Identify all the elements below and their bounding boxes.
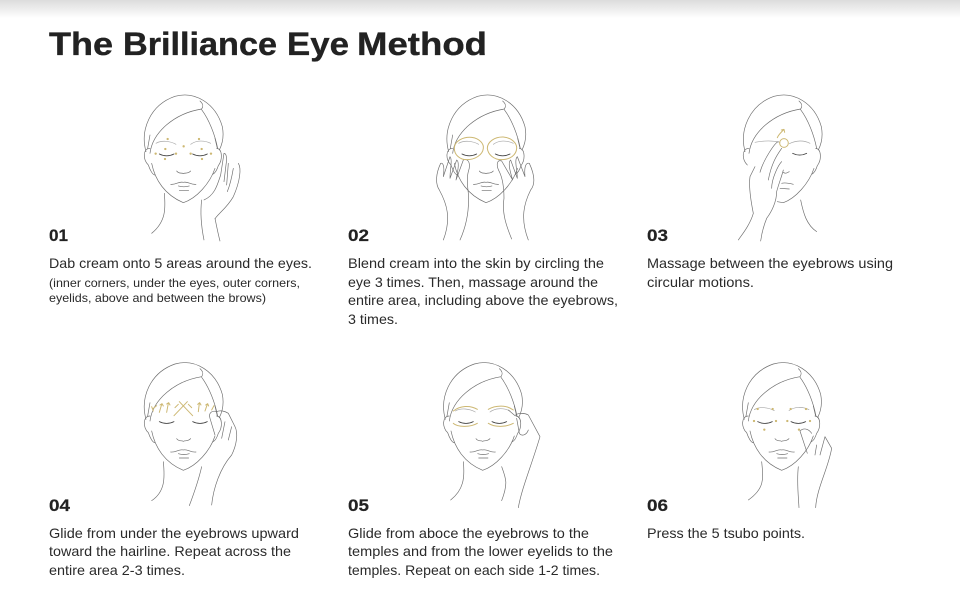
step text: Dab cream onto 5 areas around the eyes. bbox=[49, 255, 312, 271]
step text bbox=[348, 255, 618, 327]
panel: step 06 bbox=[647, 363, 832, 541]
step number: 05 bbox=[348, 496, 369, 515]
panel: step 05 bbox=[348, 363, 613, 578]
panel: step 01 bbox=[49, 95, 312, 305]
step text: Massage between the eyebrows using bbox=[647, 255, 893, 271]
step text bbox=[348, 525, 613, 578]
step number: 06 bbox=[647, 496, 668, 515]
step text: eye 3 times. Then, massage around the bbox=[348, 274, 598, 290]
title: Brilliance bbox=[123, 26, 277, 62]
step text bbox=[647, 255, 893, 290]
illustration: gliding toward the hairline bbox=[144, 363, 237, 506]
step text: temples. Repeat on each side 1-2 times. bbox=[348, 562, 600, 578]
illustration: gliding from brows and lower lids to the temples bbox=[444, 363, 540, 508]
illustration: pressing tsubo points bbox=[743, 363, 832, 508]
panel: step 03 bbox=[647, 95, 893, 290]
step text: Glide from under the eyebrows upward bbox=[49, 525, 299, 541]
step text: Glide from aboce the eyebrows to the bbox=[348, 525, 589, 541]
step text: eyelids, above and between the brows) bbox=[49, 291, 266, 305]
title bbox=[49, 26, 487, 62]
illustration: dabbing cream on five eye areas bbox=[144, 95, 240, 241]
panel: step 02 bbox=[348, 95, 618, 327]
step text: entire area 2-3 times. bbox=[49, 562, 185, 578]
step text: Press the 5 tsubo points. bbox=[647, 525, 805, 541]
step text: (inner corners, under the eyes, outer corners, bbox=[49, 276, 300, 290]
step text: Blend cream into the skin by circling the bbox=[348, 255, 604, 271]
step number: 02 bbox=[348, 226, 369, 245]
title: Eye bbox=[287, 26, 349, 62]
top shadow band bbox=[0, 0, 960, 18]
title: Method bbox=[357, 26, 487, 62]
step text: circular motions. bbox=[647, 274, 754, 290]
step text: toward the hairline. Repeat across the bbox=[49, 543, 291, 559]
panel: step 04 bbox=[49, 363, 299, 578]
step text: entire area, including above the eyebrows, bbox=[348, 292, 618, 308]
step text bbox=[49, 255, 312, 305]
illustration: massaging between the eyebrows bbox=[738, 95, 822, 241]
step number: 04 bbox=[49, 496, 71, 515]
step text bbox=[49, 525, 299, 578]
step text: temples and from the lower eyelids to the bbox=[348, 543, 613, 559]
title: The bbox=[49, 26, 113, 62]
step number: 03 bbox=[647, 226, 668, 245]
step number: 01 bbox=[49, 226, 68, 245]
step text: 3 times. bbox=[348, 311, 398, 327]
illustration: circling the eyes with both hands bbox=[437, 95, 534, 240]
